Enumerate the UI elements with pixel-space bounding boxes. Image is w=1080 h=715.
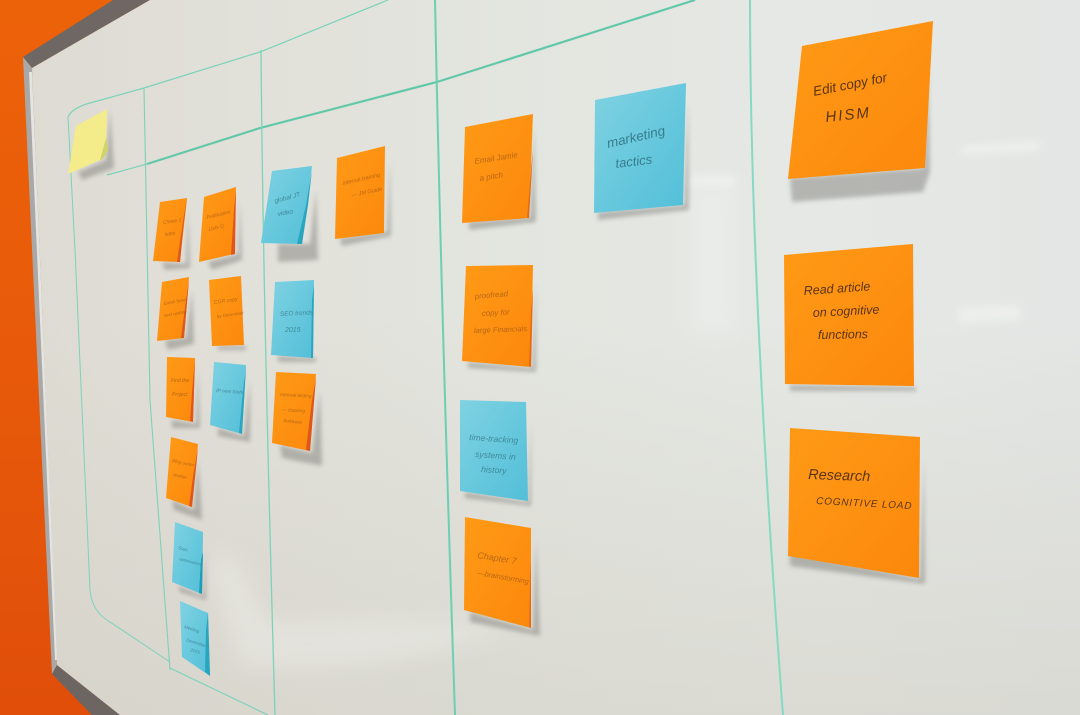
sticky note: orange, column 1: Chase 1 [162, 217, 182, 226]
sticky note: blue, global video: video [277, 208, 294, 218]
sticky note: blue, row 6: Meeting [184, 624, 201, 634]
sticky note: orange, proofread copy: copy for [482, 308, 510, 318]
sticky note: orange, proofread copy: large Financials [474, 324, 527, 335]
sticky note: orange, column 2: Publication [206, 209, 231, 221]
sticky note: blue, SEO trends: SEO trends [280, 309, 314, 318]
sticky note: orange, row 4 [166, 437, 198, 507]
sticky note: orange, internal testing [272, 372, 316, 451]
sticky note: orange, edit copy for HISM [788, 21, 933, 179]
green marker grid lines [68, 0, 783, 715]
sticky note: orange, research cognitive load: COGNITIVE LOAD [816, 496, 913, 512]
reflections on board [210, 141, 1040, 668]
sticky note: blue, global video: global JT [274, 191, 302, 205]
sticky note: blue, row 3 column 2: IP new tools [216, 388, 244, 396]
sticky note: orange, internal training [335, 146, 385, 239]
sticky note: orange, row 2 column 1: Email Team [163, 297, 187, 306]
sticky note: blue, row 5: Start [178, 545, 189, 553]
sticky note: orange, proofread copy [462, 265, 533, 367]
sticky note: blue, marketing tactics: tactics [615, 152, 653, 171]
sticky note: blue, row 3 column 2 [210, 362, 246, 434]
sticky note: orange, research cognitive load: Research [808, 467, 870, 485]
sticky note: orange, read article on cognitive functions: functions [818, 327, 868, 342]
frame highlight [29, 72, 57, 660]
top frame rail [23, 0, 150, 68]
sticky note: orange, copy by December: CGR copy [213, 297, 238, 306]
sticky note: orange, row 4: review [173, 472, 187, 480]
sticky note: blue, row 6: December [186, 637, 207, 648]
sticky note: orange, internal testing: Internal testing [280, 392, 312, 400]
sticky note: blue, time-tracking systems: time-tracking [469, 432, 519, 445]
sticky note: orange, column 2 [199, 187, 236, 262]
sticky note: orange, edit copy for HISM: HISM [825, 104, 872, 126]
sticky note: blue, time-tracking systems: history [481, 464, 508, 476]
bottom frame rail [52, 665, 120, 715]
sticky note: yellow header [68, 109, 108, 174]
sticky note: orange, proofread copy: proofread [473, 289, 509, 301]
sticky note: blue, row 6 [180, 601, 210, 676]
sticky note: blue, row 5: optimisation [179, 556, 202, 567]
sticky note: orange, email team pitch: a pitch [479, 170, 504, 183]
sticky note: orange, row 4: Blog under [172, 458, 195, 468]
sticky note: orange, email team pitch [462, 114, 533, 223]
sticky note: orange, edit copy for HISM: Edit copy for [812, 70, 889, 99]
sticky note: orange, column 1: letter [164, 230, 177, 238]
sticky note: orange, row 3 column 1 [166, 357, 195, 422]
sticky note: orange, row 3 column 1: Find the [171, 378, 189, 384]
sticky note: orange, internal testing: — tracking [281, 407, 305, 415]
sticky note: orange, internal training: internal training [342, 172, 382, 187]
sticky note: blue, time-tracking systems [460, 400, 528, 501]
sticky note: orange, row 3 column 1: Project [172, 392, 188, 398]
sticky note: orange, internal training: — JM Guide [350, 187, 383, 199]
sticky note: orange, copy by December [209, 276, 245, 346]
sticky note: orange, copy by December: by December [216, 310, 245, 319]
sticky note: orange, email team pitch: Email Jamie [474, 150, 519, 166]
sticky note: orange, column 2: Lists Q [208, 223, 225, 233]
sticky note: orange, research cognitive load [788, 428, 920, 578]
sticky note: orange, read article on cognitive functions [784, 244, 914, 386]
sticky note: blue, marketing tactics: marketing [605, 123, 667, 151]
sticky note: orange, chapter 7 brainstorming: Chapter 7 [477, 550, 518, 566]
sticky note: orange, row 2 column 1 [157, 277, 189, 341]
sticky note: blue, marketing tactics [594, 83, 686, 213]
sticky note: blue, time-tracking systems: systems in [475, 449, 516, 462]
sticky note: orange, read article on cognitive functions: Read article [803, 279, 871, 298]
sticky note: orange, read article on cognitive functions: on cognitive [812, 303, 880, 320]
sticky note: orange, chapter 7 brainstorming: —brainstorming [476, 568, 530, 586]
sticky note: blue, row 6: 2015 [189, 647, 201, 655]
sticky note: blue, SEO trends: 2015 [284, 327, 301, 334]
sticky note: blue, SEO trends [271, 280, 314, 358]
note shadows [78, 60, 930, 636]
sticky note: blue, global video [261, 166, 312, 244]
sticky note: orange, chapter 7 brainstorming [464, 517, 531, 628]
sticky note: blue, row 5 [172, 522, 203, 594]
sticky note: orange, internal testing: Software [283, 418, 303, 426]
sticky note: orange, row 2 column 1: next update [163, 309, 187, 318]
sticky note: orange, column 1 [153, 198, 187, 262]
left frame rail [23, 57, 57, 674]
